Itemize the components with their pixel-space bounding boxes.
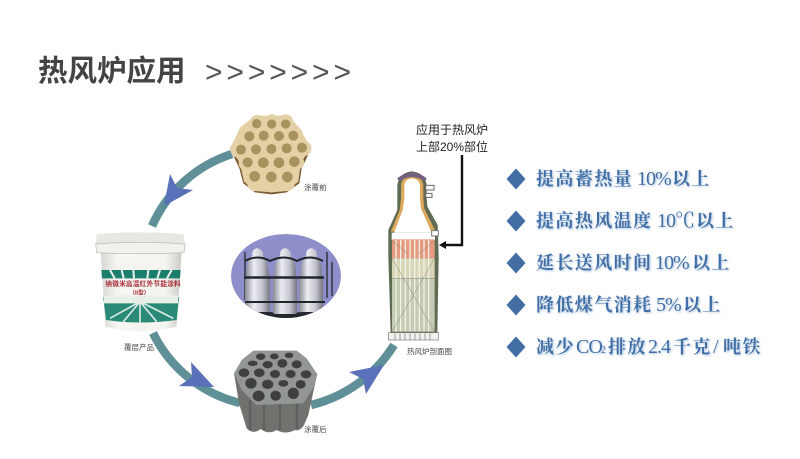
callout label: 上部20%部位 (416, 139, 488, 154)
benefit 5: / (713, 336, 719, 358)
coated product bucket: 纳微米高温红外节能涂料 (105, 279, 181, 288)
benefit 2: 以上 (696, 211, 735, 231)
benefit list (506, 168, 762, 358)
benefit 5: 减少 (536, 337, 575, 357)
photo: hot blast stoves (228, 234, 344, 320)
benefit 5: 2 (601, 345, 606, 356)
benefit 3: 10% (655, 252, 689, 274)
benefit 3: 延长送风时间 (536, 253, 652, 273)
title chevrons: >>>>>>> (205, 56, 351, 89)
brick before coating (230, 114, 311, 194)
benefit 4: 5% (656, 294, 681, 316)
furnace cross-section (388, 171, 439, 340)
benefit 2 (506, 210, 735, 232)
benefit 1: 以上 (672, 169, 711, 189)
benefit 3 (506, 252, 731, 274)
coated product bucket: （II型） (129, 288, 149, 296)
benefit 4: 降低煤气消耗 (536, 295, 652, 315)
arrowhead: to product (164, 174, 193, 206)
benefit 5: 2.4 (648, 336, 671, 358)
benefit 2: 提高热风温度 (536, 211, 652, 231)
callout label (416, 122, 488, 154)
caption: after coating: 涂覆后 (304, 424, 327, 434)
benefit 5 (506, 336, 762, 358)
coated product bucket (96, 232, 185, 331)
benefit 3: 以上 (692, 253, 731, 273)
callout label: 应用于热风炉 (416, 122, 488, 137)
benefit 1: 提高蓄热量 (536, 169, 633, 189)
benefit 5: CO (576, 336, 602, 358)
benefit 1 (506, 168, 711, 190)
benefit 5: 吨铁 (723, 337, 762, 357)
brick after coating (234, 351, 317, 432)
caption: coated product: 覆层产品 (124, 342, 154, 352)
benefit 1: 10% (637, 168, 671, 190)
caption: furnace section: 热风炉剖面图 (407, 346, 452, 356)
callout arrow (439, 155, 462, 249)
benefit 4: 以上 (683, 295, 722, 315)
benefit 2: 10℃ (657, 210, 694, 232)
arrowhead: to furnace (349, 365, 384, 394)
benefit 5: 排放 (608, 337, 647, 357)
title: 热风炉应用 (38, 55, 186, 88)
benefit 5: 千克 (673, 337, 712, 357)
cycle arcs (152, 154, 394, 405)
caption: before coating: 涂覆前 (304, 182, 327, 192)
benefit 4 (506, 294, 722, 316)
arrowhead: to coated brick (179, 362, 214, 387)
